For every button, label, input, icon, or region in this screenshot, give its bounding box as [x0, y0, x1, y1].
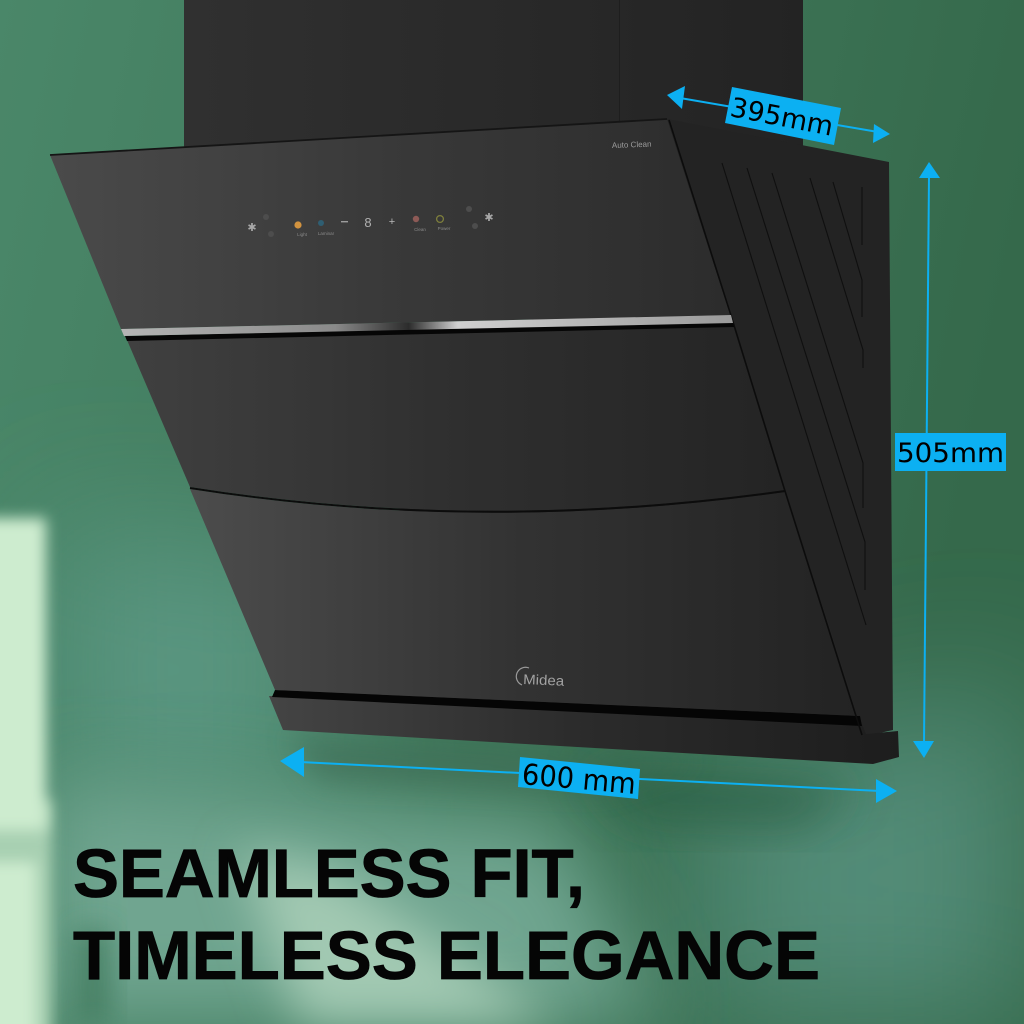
- side panel slots: [722, 163, 866, 625]
- base bar: [269, 696, 899, 764]
- faint fan speed dots left: [263, 214, 274, 237]
- steel strip: [121, 315, 733, 336]
- chimney duct: [184, 0, 803, 160]
- middle glass panel: [127, 325, 786, 511]
- dimension: height 505mm: 505mm: [897, 438, 1004, 469]
- Midea logo: Midea: [523, 671, 565, 689]
- shadow slot: [272, 690, 862, 726]
- headline: [73, 835, 820, 994]
- hood body: [50, 119, 899, 764]
- lower glass panel: [190, 489, 859, 716]
- dimension: width 600mm: 600 mm: [521, 757, 637, 801]
- plus: +: [389, 216, 395, 228]
- Laminar label: Laminar: [318, 231, 335, 236]
- dimension: depth 395mm: [667, 86, 890, 145]
- side panel: [667, 119, 893, 737]
- dimension: depth 395mm: 395mm: [728, 92, 836, 143]
- light label: Light: [297, 232, 308, 237]
- Midea logo: [516, 667, 565, 689]
- edge seam: [669, 120, 862, 735]
- minus: [341, 221, 348, 222]
- digit display: 8: [364, 215, 372, 230]
- fan icon left: ✱: [247, 222, 257, 234]
- window light on wall: [0, 518, 110, 1024]
- clean label: Clean: [414, 227, 426, 232]
- Auto Clean label: Auto Clean: [612, 140, 652, 150]
- light icon: [294, 221, 302, 229]
- panel seam: [190, 488, 785, 512]
- control panel: [247, 140, 652, 237]
- dimension: height 505mm: [895, 162, 1006, 758]
- power label: Power: [438, 226, 451, 231]
- power icon: [437, 216, 443, 222]
- top glass panel: [50, 119, 730, 329]
- faint fan speed dots right: [466, 206, 478, 229]
- headline: TIMELESS ELEGANCE: [73, 917, 820, 994]
- dark gap under strip: [125, 322, 734, 341]
- fan icon right: ✱: [484, 212, 494, 224]
- clean icon: [413, 216, 419, 222]
- dimension: width 600mm: [280, 747, 897, 803]
- Laminar icon: [318, 220, 324, 226]
- backing shape: [275, 125, 862, 730]
- headline: SEAMLESS FIT,: [73, 835, 585, 912]
